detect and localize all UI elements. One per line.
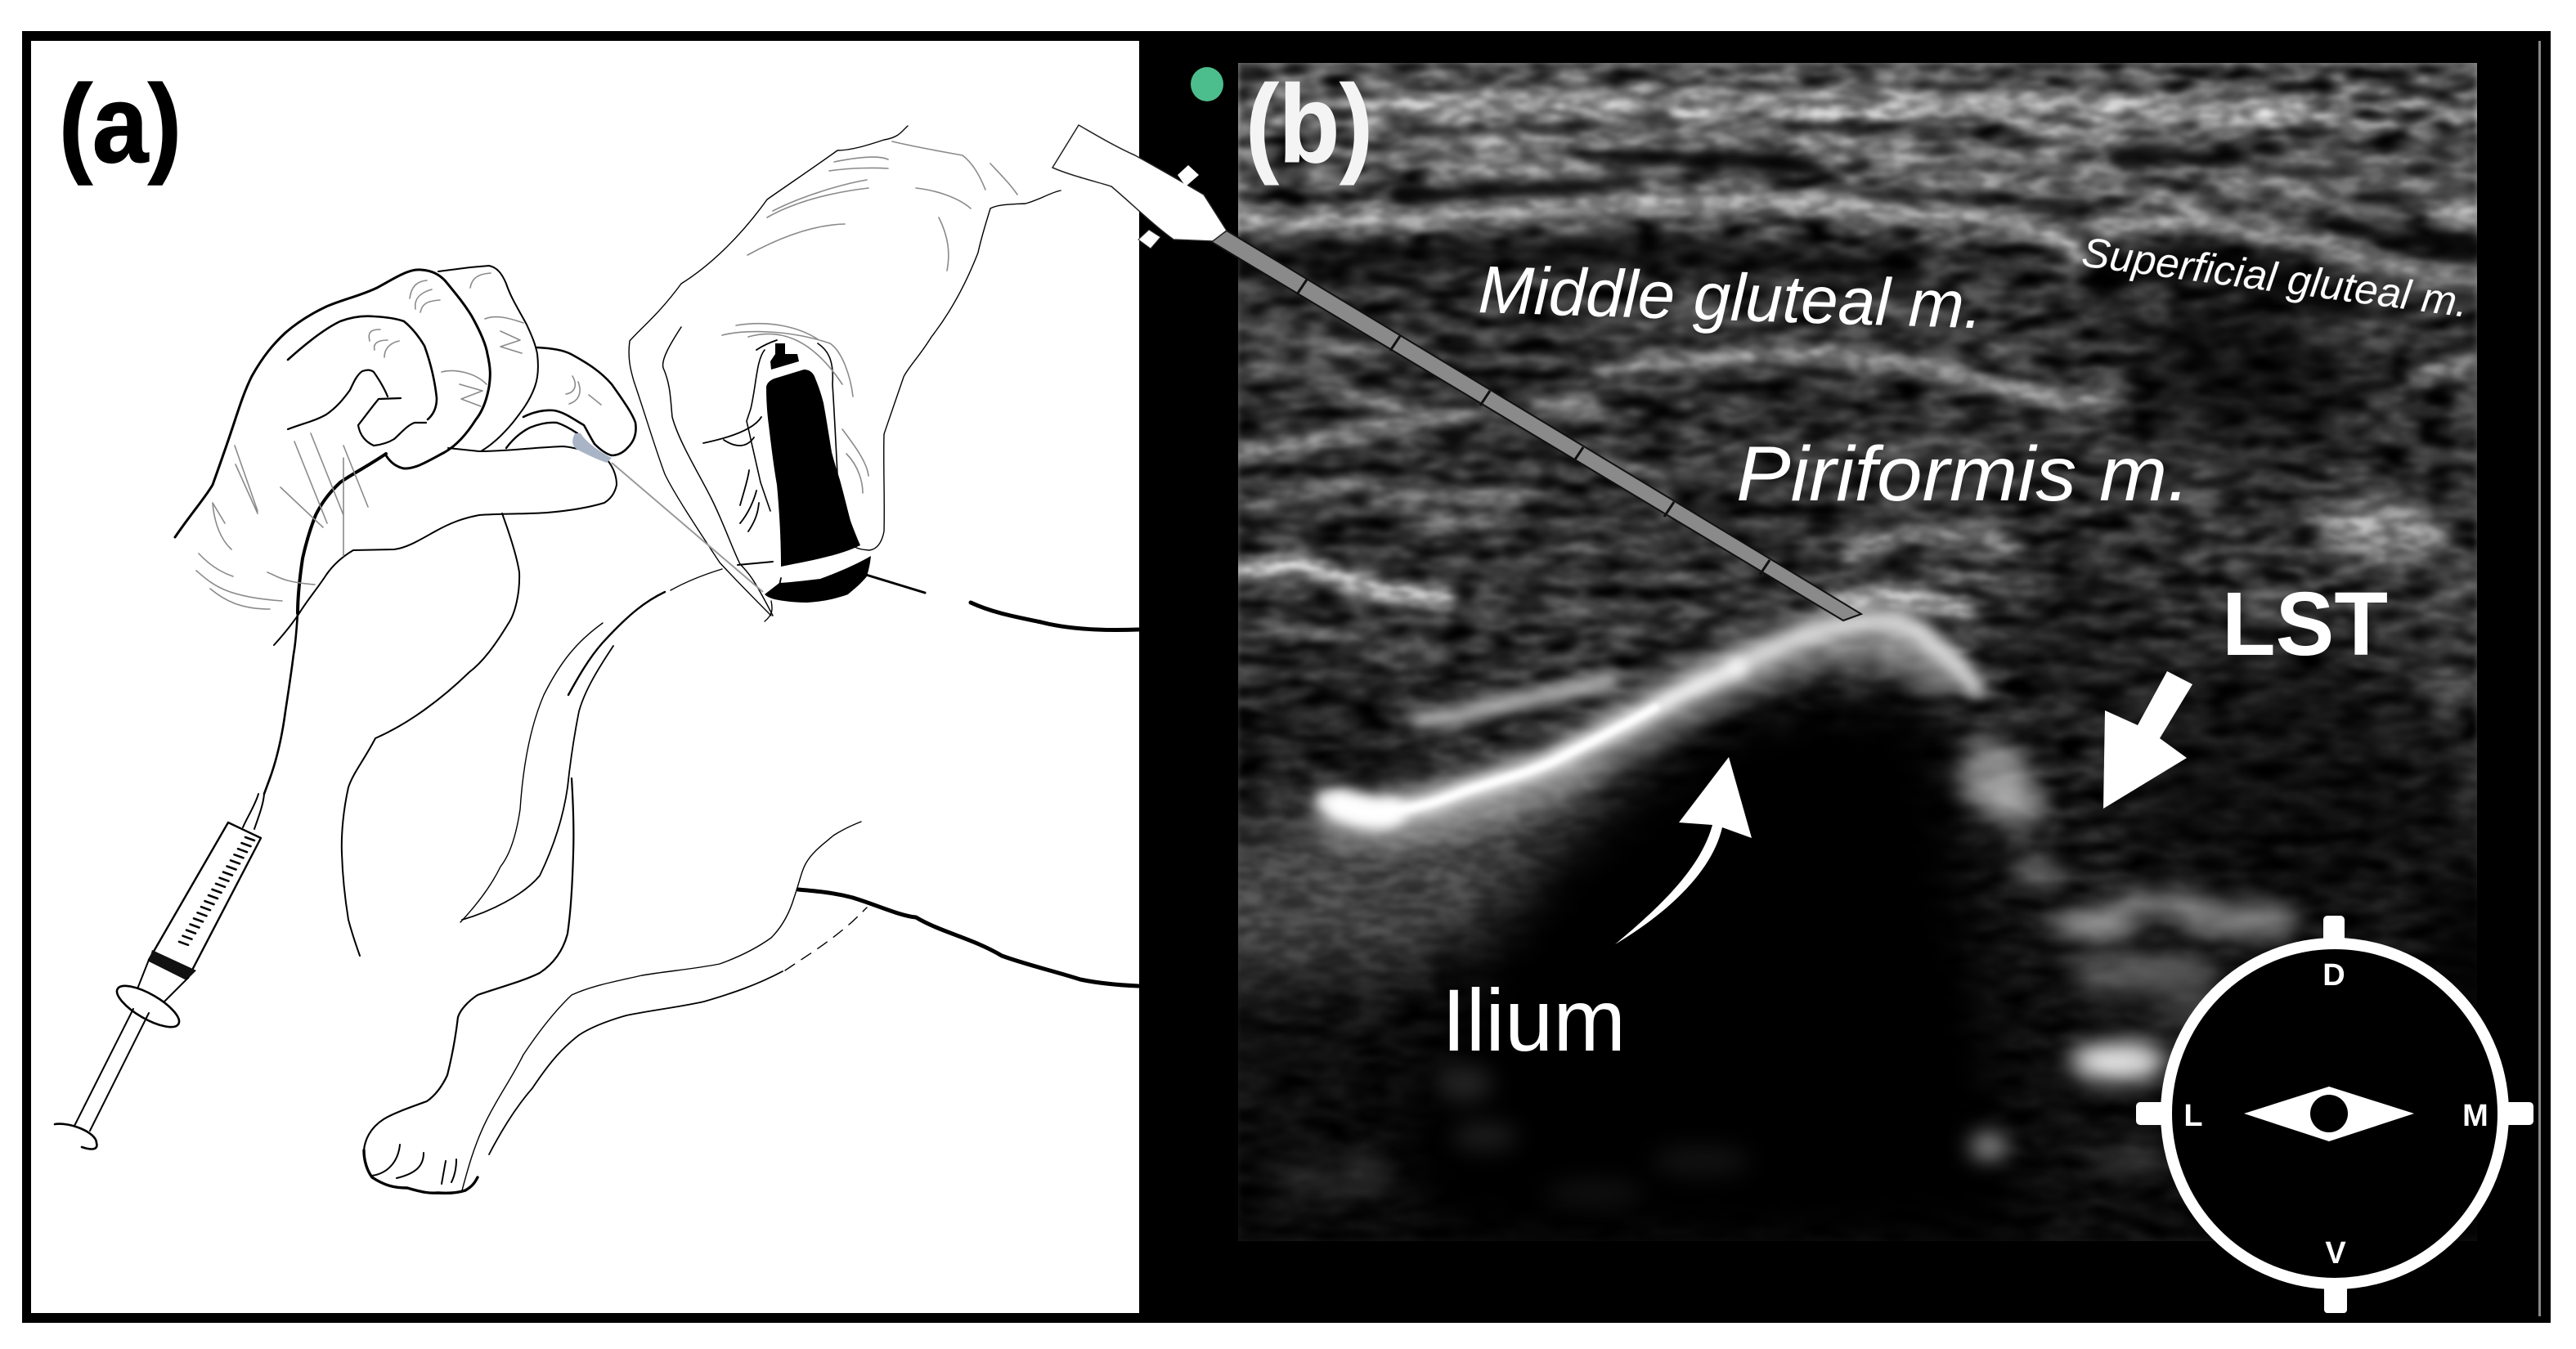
ilium bone surface	[1325, 621, 1975, 821]
arrow to LST	[2103, 671, 2192, 809]
label: superficial gluteal muscle: Superficial gluteal m.	[2080, 228, 2471, 326]
compass eye	[2244, 1087, 2414, 1141]
panel b: ultrasound image	[1052, 41, 2551, 1323]
left hand holding needle	[175, 266, 636, 794]
compass letters: V	[2325, 1236, 2346, 1271]
status dot	[1191, 67, 1223, 101]
panel label b: (b)	[1245, 62, 1373, 186]
glow beneath bone line	[1259, 834, 1554, 899]
label: ilium: Ilium	[1442, 970, 1626, 1069]
compass letters: D	[2322, 958, 2345, 993]
superficial dark bands	[1251, 128, 2477, 307]
right edge line	[2538, 41, 2541, 1316]
syringe cable	[264, 454, 386, 794]
ultrasound probe	[765, 343, 871, 603]
ultrasound sonogram	[1210, 63, 2511, 1259]
acoustic shadows	[1210, 286, 2511, 1259]
compass letters: M	[2462, 1099, 2488, 1133]
right side blobs	[2175, 321, 2478, 698]
fine speckle over echoes	[1238, 63, 2477, 1241]
needle overlay	[1210, 231, 1861, 621]
arrow to ilium	[1615, 757, 1752, 944]
superficial echo bands	[1241, 103, 2477, 284]
glove creases	[196, 273, 601, 609]
label: LST: LST	[2222, 574, 2388, 674]
right hand holding ultrasound probe	[612, 126, 1061, 616]
syringe	[55, 794, 264, 1149]
panel a: injection illustration	[31, 41, 1139, 1313]
speckle texture	[1238, 63, 2477, 1241]
panel label a: (a)	[59, 62, 182, 186]
blue injection point	[572, 433, 612, 463]
label: middle gluteal muscle: Middle gluteal m.	[1477, 253, 1984, 343]
paw toes	[372, 1145, 456, 1184]
orientation compass	[2136, 916, 2533, 1313]
dog body outline	[342, 513, 1138, 1193]
needle in illustration	[612, 463, 763, 592]
needle hub	[1052, 125, 1227, 249]
lateral deep echoes	[1284, 741, 2302, 1208]
compass letters	[2183, 958, 2488, 1271]
compass letters: L	[2183, 1099, 2203, 1133]
label: piriformis muscle: Piriformis m.	[1736, 431, 2190, 518]
thumb and index finger	[274, 446, 617, 645]
muscle layer echoes	[1241, 311, 2471, 654]
